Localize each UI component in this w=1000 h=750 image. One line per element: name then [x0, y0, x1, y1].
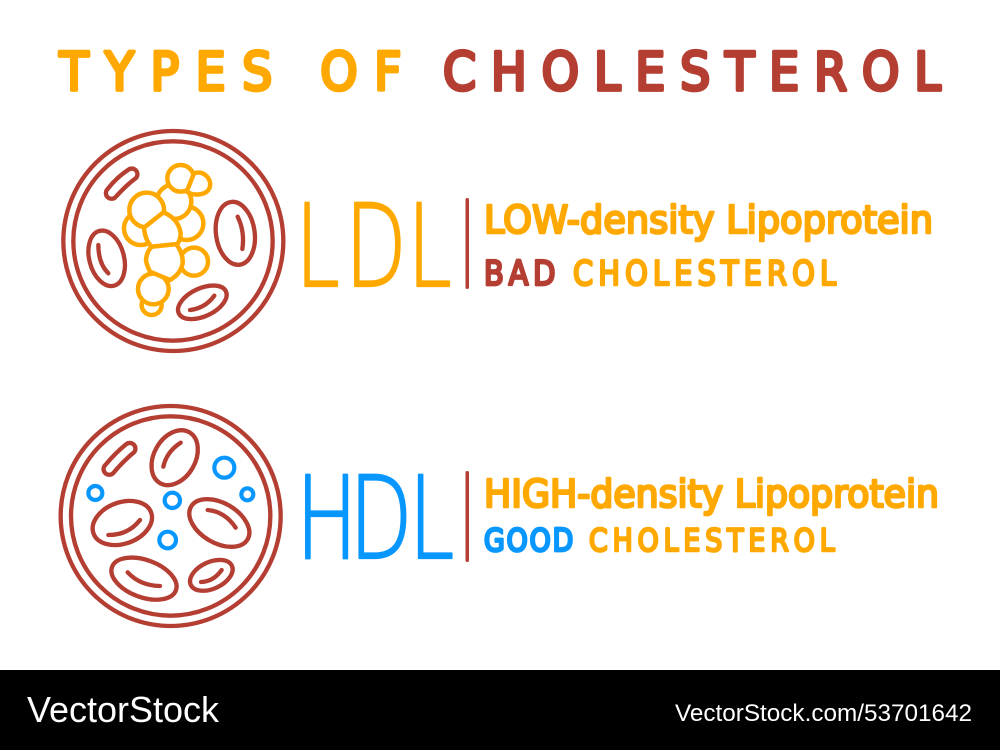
icon: LDL blood vessel	[63, 131, 283, 351]
title: CHOLESTEROL	[443, 41, 941, 103]
HDL description	[484, 472, 939, 559]
LDL description: LOW-density Lipoprotein	[484, 198, 933, 243]
title	[59, 41, 941, 103]
panel: LDL	[63, 131, 933, 351]
LDL description: BAD	[484, 255, 555, 294]
panel: HDL	[61, 406, 939, 626]
footer bar: VectorStock	[27, 689, 220, 730]
LDL description: CHOLESTEROL	[573, 255, 836, 294]
footer bar: VectorStock.com/53701642	[675, 700, 972, 727]
icon: HDL blood vessel	[61, 406, 281, 626]
title: TYPES OF	[59, 41, 401, 103]
LDL heading: LDL	[295, 182, 452, 314]
HDL heading: HDL	[296, 454, 454, 586]
divider HDL	[466, 471, 469, 562]
footer bar	[0, 670, 1000, 750]
LDL description	[484, 198, 933, 294]
HDL description: HIGH-density Lipoprotein	[484, 472, 939, 517]
HDL description: CHOLESTEROL	[589, 522, 835, 559]
HDL description: GOOD	[484, 522, 573, 559]
divider LDL	[466, 198, 469, 289]
